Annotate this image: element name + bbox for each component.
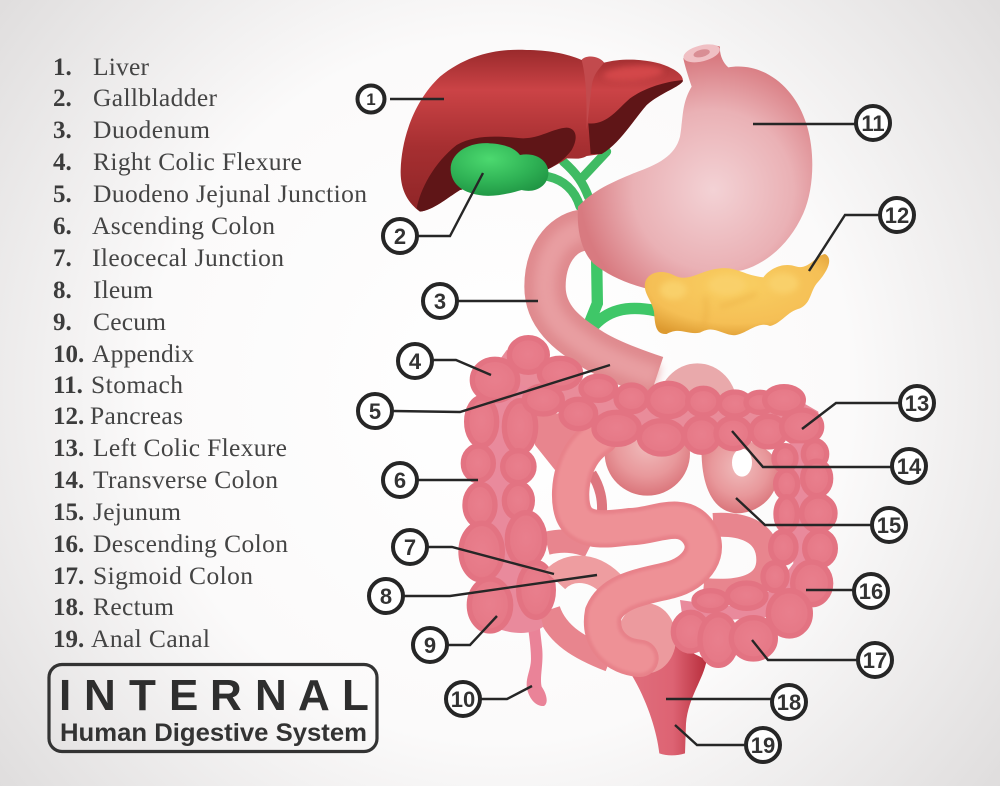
number callouts: 10 <box>451 687 475 712</box>
text block: numbered legend: Pancreas <box>90 401 183 430</box>
number callouts: 13 <box>905 391 929 416</box>
text block: numbered legend: 19. <box>53 626 84 653</box>
descending and sigmoid colon <box>673 441 835 665</box>
text block: numbered legend: Duodenum <box>93 115 210 144</box>
text block: numbered legend: 15. <box>53 499 84 526</box>
title box: Human Digestive System <box>60 719 367 747</box>
text block: numbered legend: Gallbladder <box>93 83 218 112</box>
text block: numbered legend: 1. <box>53 54 72 81</box>
transverse colon <box>472 338 822 454</box>
appendix <box>527 623 547 706</box>
text block: numbered legend: 7. <box>53 245 72 272</box>
text block: numbered legend: Cecum <box>93 307 166 336</box>
number callouts: 9 <box>424 633 436 658</box>
text block: numbered legend: Descending Colon <box>93 529 288 558</box>
ascending colon <box>461 350 553 633</box>
title box <box>49 664 377 752</box>
text block: numbered legend: 5. <box>53 181 72 208</box>
number callouts: 14 <box>897 454 922 479</box>
text block: numbered legend: Duodeno Jejunal Junction <box>93 179 367 208</box>
number callouts: 15 <box>877 513 901 538</box>
duodenum <box>545 230 657 377</box>
text block: numbered legend: Stomach <box>91 370 183 399</box>
text block: numbered legend: Ileum <box>93 275 153 304</box>
liver shadow lobes <box>417 128 576 212</box>
number callouts: 11 <box>861 111 885 136</box>
number callouts: 16 <box>859 579 883 604</box>
number callouts: 6 <box>394 468 406 493</box>
text block: numbered legend: 17. <box>53 563 84 590</box>
stomach <box>578 41 812 293</box>
bile ducts <box>548 152 655 330</box>
jejunum bulbs <box>605 363 778 513</box>
text block: numbered legend: 14. <box>53 467 84 494</box>
number callouts: 1 <box>366 90 376 109</box>
liver <box>401 50 683 212</box>
back ileum tubes <box>533 413 768 660</box>
number callouts <box>358 86 934 762</box>
text block: numbered legend: Rectum <box>93 592 174 621</box>
text block: numbered legend: 12. <box>53 403 84 430</box>
text block: numbered legend: 18. <box>53 594 84 621</box>
number callouts: 17 <box>863 648 887 673</box>
text block: numbered legend: Transverse Colon <box>93 465 278 494</box>
text block: numbered legend: Right Colic Flexure <box>93 147 302 176</box>
upper organs <box>401 41 829 377</box>
title box: INTERNAL <box>59 671 369 720</box>
rectum <box>632 643 707 755</box>
text block: numbered legend: Ileocecal Junction <box>92 243 284 272</box>
text block: numbered legend: 6. <box>53 213 72 240</box>
text block: numbered legend: 11. <box>53 372 83 399</box>
text block: numbered legend: 9. <box>53 309 72 336</box>
text block: numbered legend: 4. <box>53 149 72 176</box>
number callouts: 3 <box>434 289 446 314</box>
number callouts: 4 <box>409 349 422 374</box>
text block: numbered legend: Ascending Colon <box>92 211 275 240</box>
text block: numbered legend: Sigmoid Colon <box>93 561 253 590</box>
number callouts: 8 <box>380 584 392 609</box>
number callouts: 12 <box>885 203 909 228</box>
number callouts: 2 <box>394 224 406 249</box>
text block: numbered legend <box>53 52 367 653</box>
text block: numbered legend: 10. <box>53 341 84 368</box>
number callouts: 19 <box>751 733 775 758</box>
text block: numbered legend: 16. <box>53 531 84 558</box>
gallbladder <box>451 143 548 196</box>
pancreas <box>645 254 829 335</box>
leader lines <box>390 99 899 745</box>
text block: numbered legend: Left Colic Flexure <box>93 433 287 462</box>
text block: numbered legend: Anal Canal <box>91 624 210 653</box>
text block: numbered legend: 8. <box>53 277 72 304</box>
text block: numbered legend: 2. <box>53 85 72 112</box>
text block: numbered legend: Jejunum <box>93 497 181 526</box>
lower organs <box>461 338 835 755</box>
text block: numbered legend: Appendix <box>92 339 194 368</box>
text block: numbered legend: 3. <box>53 117 72 144</box>
text block: numbered legend: Liver <box>93 52 150 81</box>
number callouts: 5 <box>369 399 381 424</box>
number callouts: 7 <box>404 535 416 560</box>
text block: numbered legend: 13. <box>53 435 84 462</box>
number callouts: 18 <box>777 690 801 715</box>
small intestine tube <box>555 437 703 673</box>
